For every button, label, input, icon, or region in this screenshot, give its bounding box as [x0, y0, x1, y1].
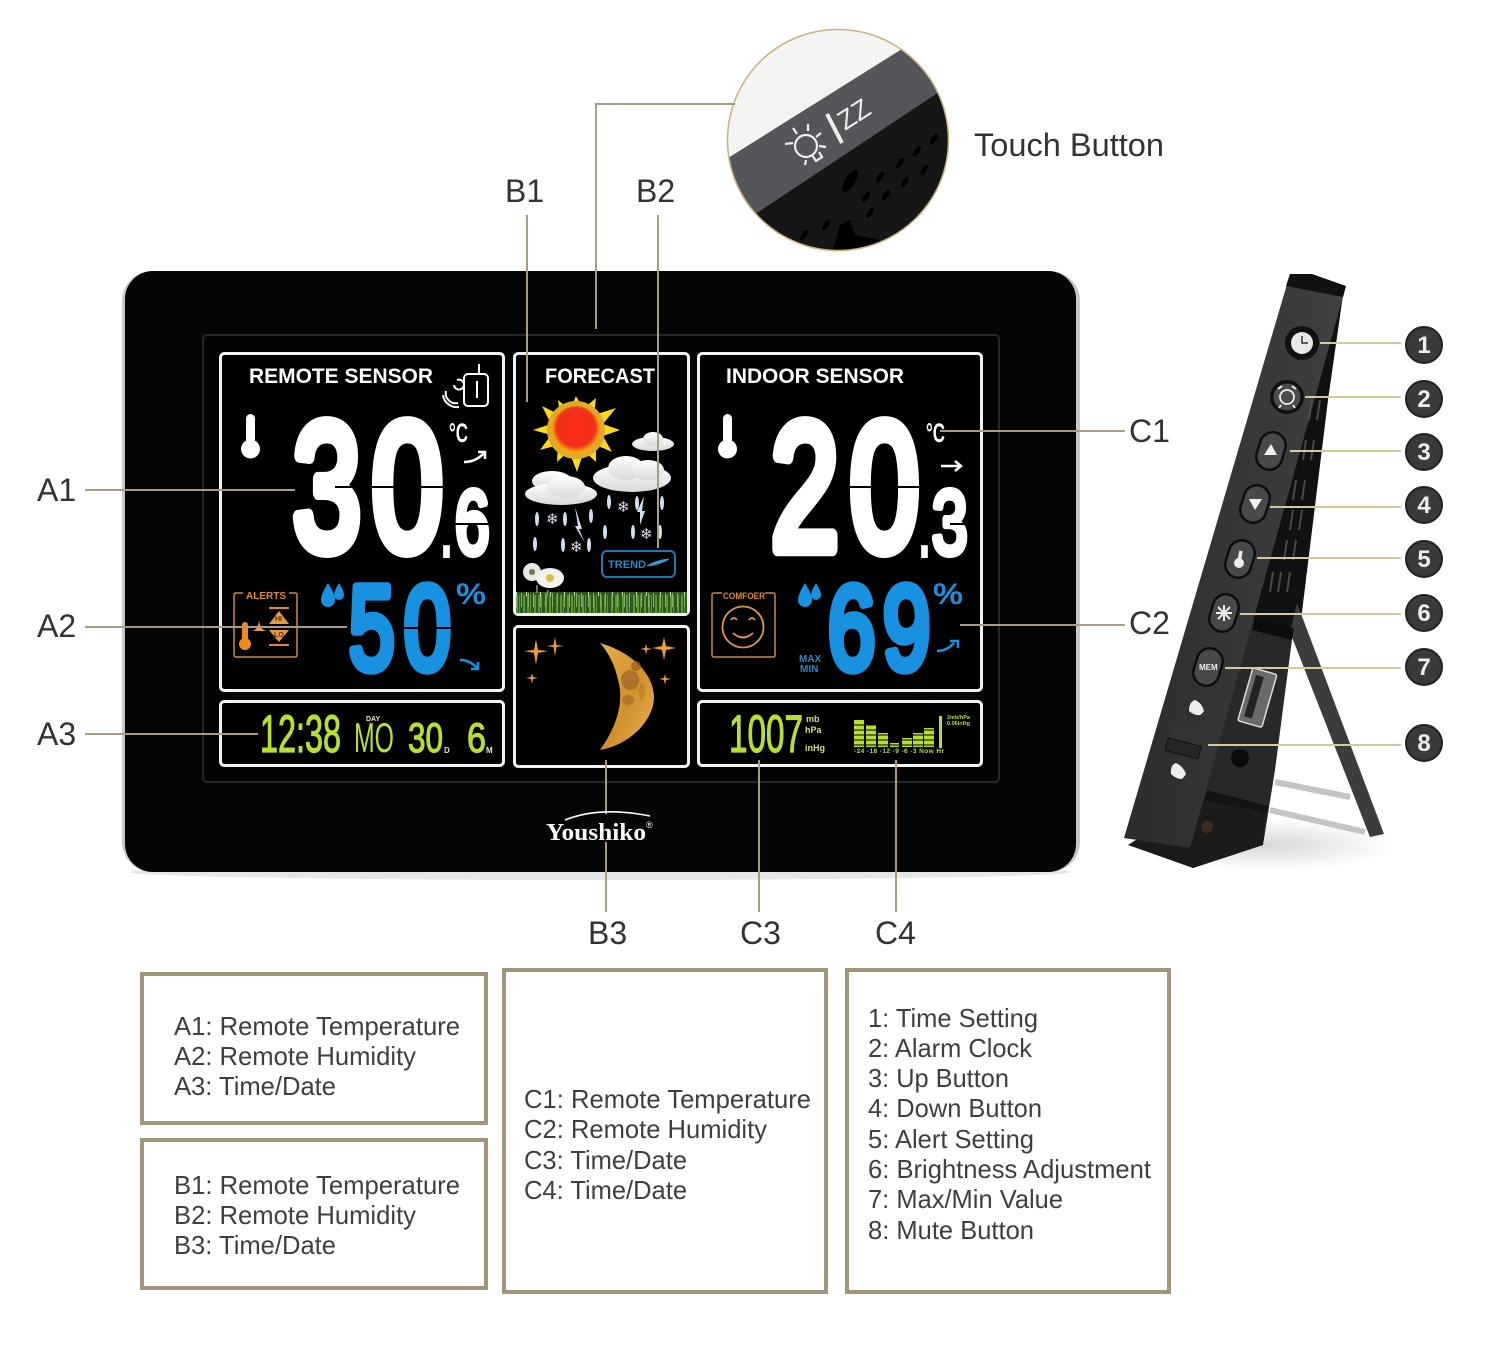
leader lines: side buttons — [1208, 343, 1401, 745]
humidity reading 69 — [828, 561, 930, 694]
temperature reading 20.3: . — [915, 449, 934, 584]
legend box: C items: C3: Time/Date — [524, 1145, 687, 1175]
icon: thermometer — [718, 414, 737, 458]
max min labels: MIN — [800, 664, 818, 675]
stand — [1290, 603, 1384, 837]
legend box: numbered buttons: 8: Mute Button — [868, 1215, 1034, 1245]
humidity reading 50 — [349, 561, 451, 695]
legend box: C items: C4: Time/Date — [524, 1175, 687, 1205]
humidity reading 50: 5 — [349, 561, 395, 695]
number badge 3 — [1406, 434, 1442, 470]
icon: sun — [533, 396, 620, 472]
temperature reading 20.3: 0 — [850, 386, 919, 587]
legend box: A items: A1: Remote Temperature — [174, 1011, 460, 1041]
icon: remote signal — [443, 364, 488, 407]
date reading: 30 — [408, 714, 443, 761]
panel: forecast — [514, 354, 688, 614]
number badge 4: 4 — [1417, 492, 1431, 519]
day unit: D — [444, 746, 450, 755]
panel: indoor sensor — [698, 354, 982, 694]
icon: right clouds — [593, 432, 674, 492]
temperature reading 30.6: 3 — [293, 386, 361, 588]
pressure units — [805, 714, 825, 753]
humidity reading 69: 6 — [828, 561, 875, 694]
pressure scale label: 0.06inHg — [947, 721, 970, 727]
comfort box — [712, 591, 775, 657]
number badge 8: 8 — [1417, 730, 1431, 757]
number badge 7 — [1406, 649, 1442, 685]
alerts box: ALERTS — [246, 591, 286, 602]
arrow: temperature steady — [941, 461, 961, 471]
legend box: numbered buttons: 1: Time Setting — [868, 1003, 1038, 1033]
pressure scale label: 2mb/hPa — [947, 715, 971, 721]
label: A3: A3 — [37, 716, 76, 752]
temperature reading 30.6: . — [437, 449, 456, 584]
label: C1: C1 — [1129, 413, 1170, 449]
legend box: A items: A2: Remote Humidity — [174, 1041, 416, 1071]
unit: degrees C: °C — [449, 418, 468, 448]
number badge 6 — [1406, 595, 1442, 631]
legend box: C items — [504, 970, 826, 1292]
label: B1: B1 — [505, 173, 544, 209]
legend box: numbered buttons: 4: Down Button — [868, 1093, 1042, 1123]
legend box: numbered buttons: 2: Alarm Clock — [868, 1033, 1033, 1063]
humidity reading 69: 9 — [883, 561, 930, 694]
button 1: clock — [1285, 326, 1319, 360]
icon: daisies — [523, 563, 564, 604]
button 2: alarm clock — [1270, 380, 1304, 414]
trend box: TREND — [608, 559, 646, 571]
icon: light bulb — [785, 124, 826, 165]
unit: percent: % — [933, 578, 963, 611]
legend box: C items: C2: Remote Humidity — [524, 1114, 767, 1144]
icon: crescent moon — [600, 643, 654, 750]
label: C4: C4 — [875, 915, 916, 951]
panel: barometer and pressure history — [698, 702, 982, 766]
panel: moon phase — [514, 626, 688, 766]
icon: rain, snow and lightning: ❄ — [617, 499, 630, 516]
label: A2: A2 — [37, 608, 76, 644]
legend box: numbered buttons: 5: Alert Setting — [868, 1124, 1034, 1154]
comfort box: COMFOER — [723, 591, 765, 601]
temperature reading 30.6: 6 — [455, 473, 489, 573]
legend box: B items: B3: Time/Date — [174, 1230, 336, 1260]
side view of the device — [1124, 274, 1395, 871]
pressure units: hPa — [805, 725, 823, 735]
icon: rain, snow and lightning: ❄ — [570, 539, 583, 556]
number badge 1 — [1406, 327, 1442, 363]
device front body — [122, 271, 1080, 880]
legend box: B items: B1: Remote Temperature — [174, 1170, 460, 1200]
pressure units: inHg — [805, 743, 825, 753]
pressure units: mb — [806, 714, 820, 724]
USB port — [1238, 668, 1277, 727]
clock reading: 12:38 — [260, 705, 341, 764]
arrow: temperature rising — [464, 452, 485, 462]
leader lines: callouts — [85, 104, 1125, 912]
legend box: numbered buttons: 7: Max/Min Value — [868, 1184, 1063, 1214]
brand logo: Youshiko — [546, 820, 646, 846]
pressure reading: 1007 — [729, 705, 803, 764]
panel: time and date — [220, 702, 504, 766]
number badge 5: 5 — [1417, 546, 1431, 573]
unit: degrees C: °C — [926, 418, 945, 448]
icon: thermometer — [241, 414, 260, 458]
number badge 1: 1 — [1417, 332, 1431, 359]
label: C3: C3 — [740, 915, 781, 951]
temperature reading 20.3: 2 — [771, 386, 839, 588]
day label: DAY — [366, 716, 380, 723]
temperature reading 20.3 — [771, 386, 968, 588]
label: Touch Button: Touch Button — [974, 127, 1164, 163]
label: C2: C2 — [1129, 605, 1170, 641]
number badge 5 — [1406, 541, 1442, 577]
button 7: MEM — [1190, 645, 1226, 689]
heading: remote sensor: REMOTE SENSOR — [249, 365, 433, 388]
icon: divider slash — [827, 114, 842, 143]
label: B3: B3 — [588, 915, 627, 951]
number badge 8 — [1406, 725, 1442, 761]
button 7: MEM: MEM — [1199, 663, 1218, 672]
bar chart axis labels: -24 -18 -12 -9 -6 -3 Now Hr — [854, 748, 944, 755]
month reading: 6 — [467, 714, 486, 761]
legend box: C items: C1: Remote Temperature — [524, 1084, 811, 1114]
number badge 2 — [1406, 381, 1442, 417]
unit: percent: % — [456, 578, 486, 611]
humidity reading 50: 0 — [404, 562, 451, 694]
max min labels — [799, 654, 822, 675]
legend box: B items — [142, 1140, 486, 1288]
alerts box: LO — [274, 632, 284, 639]
temperature reading 30.6: 0 — [372, 387, 443, 588]
heading: indoor sensor: INDOOR SENSOR — [726, 365, 904, 388]
panel: remote sensor — [220, 354, 504, 695]
number badge 2: 2 — [1417, 386, 1431, 413]
legend box: numbered buttons: 6: Brightness Adjustment — [868, 1154, 1152, 1184]
number badge 7: 7 — [1417, 654, 1431, 681]
month unit: M — [486, 746, 493, 755]
icon: humidity drops — [798, 583, 821, 607]
label: B2: B2 — [636, 173, 675, 209]
grass — [516, 592, 687, 613]
alerts box: HI — [275, 616, 282, 623]
icon: humidity drops — [321, 583, 344, 607]
temperature reading 20.3: 3 — [932, 472, 968, 573]
icon: snooze Zz: ZZ — [832, 93, 876, 136]
number badge 4 — [1406, 487, 1442, 523]
number badge 3: 3 — [1417, 439, 1431, 466]
button 4: down — [1237, 482, 1273, 526]
legend box: A items — [142, 974, 486, 1123]
button 5: thermometer — [1222, 537, 1258, 581]
max min labels: MAX — [799, 654, 822, 665]
temperature reading 30.6 — [293, 386, 489, 588]
icon: stars — [524, 637, 676, 685]
button 3: up — [1253, 429, 1289, 473]
legend box: numbered buttons — [847, 970, 1169, 1292]
number badge 6: 6 — [1417, 600, 1431, 627]
brand logo — [545, 812, 653, 846]
icon: left cloud — [525, 471, 597, 505]
label: A1: A1 — [37, 472, 76, 508]
weekday reading: MO — [354, 714, 394, 761]
button 6: brightness — [1206, 591, 1242, 635]
trend box — [602, 551, 675, 577]
legend box: A items: A3: Time/Date — [174, 1071, 336, 1101]
magnified touch button inset — [726, 28, 950, 252]
icon: rain, snow and lightning: ❄ — [640, 526, 653, 543]
legend box: numbered buttons: 3: Up Button — [868, 1063, 1009, 1093]
icon: rain, snow and lightning — [533, 495, 664, 556]
heading: forecast: FORECAST — [545, 365, 655, 388]
arrow: humidity rising — [937, 641, 958, 651]
brand logo: ® — [646, 820, 653, 830]
legend box: B items: B2: Remote Humidity — [174, 1200, 416, 1230]
pressure bar chart — [854, 716, 942, 748]
arrow: humidity falling — [460, 660, 478, 669]
alerts box — [234, 591, 297, 657]
icons: bell on and off — [1171, 700, 1204, 779]
pressure scale label — [947, 715, 971, 727]
icon: rain, snow and lightning: ❄ — [546, 511, 559, 528]
mute switch — [1165, 724, 1205, 759]
